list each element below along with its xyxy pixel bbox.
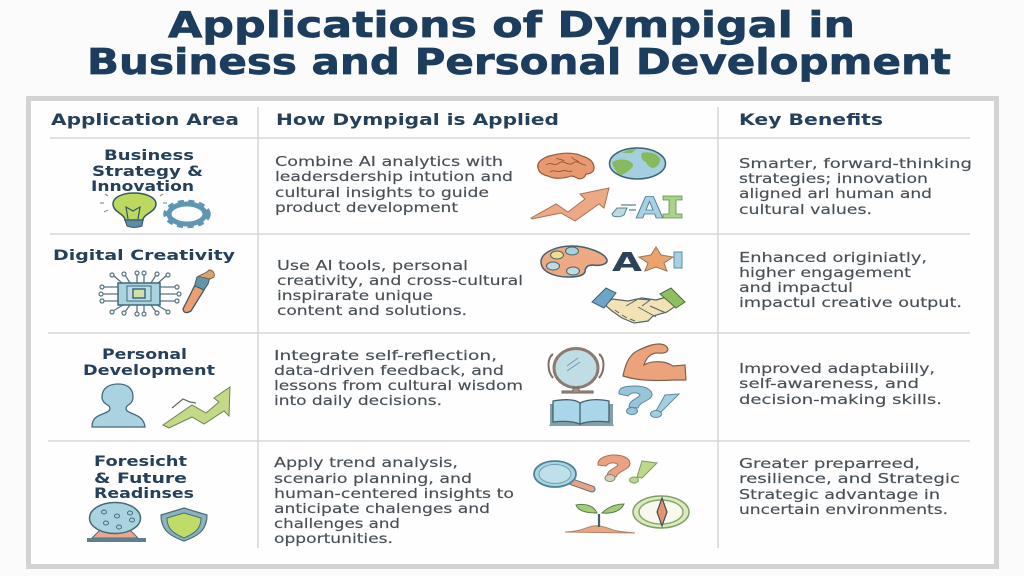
row 4 benefits (739, 456, 960, 518)
title (87, 5, 951, 83)
row 3 description (274, 348, 523, 409)
icon: AI letters: A (636, 191, 664, 225)
row 2 benefits: and impactul (739, 280, 853, 296)
icon: shield (161, 508, 207, 541)
row 1 area name: Business (104, 148, 194, 164)
row 4 description: human-centered insights to (274, 486, 514, 502)
icon: paintbrush (183, 270, 214, 313)
row 4 benefits: Strategic advantage in (739, 487, 940, 503)
row 1 benefits: Smarter, forward-thinking (739, 156, 972, 172)
row 4 description (274, 455, 514, 547)
row 2 description: Use AI tools, personal (277, 258, 468, 274)
row 2 description (277, 258, 523, 319)
icon: mirror (548, 348, 604, 393)
row 4 benefits: Greater preparreed, (739, 456, 920, 472)
row 3 description: into daily decisions. (274, 393, 442, 409)
icon: growth arrow (531, 188, 609, 221)
title: Applications of Dympigal in (168, 5, 855, 46)
row 3: personal development (83, 344, 942, 428)
icon: orange question and green exclamation (598, 455, 657, 483)
table header: Key Benefits (739, 110, 883, 129)
row 1 area name: Strategy & (92, 164, 203, 180)
icon: flexed arm (623, 344, 686, 381)
row 1 description: Combine AI analytics with (275, 154, 503, 170)
row 1: business strategy (91, 148, 972, 228)
row 4 description: scenario planning, and (274, 471, 472, 487)
table header (51, 110, 883, 129)
row 1 description: cultural insights to guide (275, 185, 489, 201)
icon: light bulb (100, 193, 167, 228)
icon: green growth arrow (163, 387, 230, 428)
icon: handshake (592, 288, 685, 323)
icon: open book (549, 400, 614, 426)
row 1 area name: Innovation (91, 179, 194, 195)
row 3 description: Integrate self-reflection, (274, 348, 497, 364)
row 3 description: data-driven feedback, and (274, 363, 504, 379)
icon: AI letters (612, 191, 682, 225)
row 4 description: opportunities. (274, 531, 393, 547)
icon: crystal ball (87, 502, 146, 542)
icon: magnifying glass (534, 461, 592, 489)
icon: person (92, 384, 145, 427)
row 3 benefits: Improved adaptabiilly, (739, 361, 935, 377)
row 1 description: product development (275, 200, 458, 216)
row 4 area name: Readinses (94, 486, 194, 502)
row 4 description: anticipate chalenges and (274, 501, 490, 517)
icon: AI with star: A (612, 248, 642, 278)
icon: circuit chip (99, 271, 181, 316)
icon: sprout (565, 504, 635, 533)
row 2 benefits: Enhanced originiatly, (739, 250, 927, 266)
row 2 benefits (739, 250, 962, 311)
table header: How Dympigal is Applied (276, 110, 559, 129)
row 3 benefits: self-awareness, and (739, 376, 919, 392)
icon: question and exclamation (619, 386, 679, 418)
row 3 description: lessons from cultural wisdom (274, 378, 523, 394)
row 2: digital creativity (53, 246, 962, 323)
row 1 benefits: aligned arl human and (739, 186, 932, 202)
icon: compass (633, 496, 689, 528)
table panel (28, 98, 996, 566)
row 4 benefits: uncertain environments. (739, 502, 948, 518)
row 4: foresight (87, 454, 960, 547)
row 4 description: challenges and (274, 516, 400, 532)
row 2 benefits: higher engagement (739, 265, 911, 281)
row 2 area name: Digital Creativity (53, 248, 236, 264)
title: Business and Personal Development (87, 42, 951, 83)
row 1 area name (91, 148, 203, 195)
row 1 description: leadersdership intution and (275, 169, 513, 185)
icon: gear (165, 202, 209, 226)
row 4 benefits: resilience, and Strategic (739, 471, 960, 487)
row 2 description: creativity, and cross-cultural (277, 273, 523, 289)
row 2 description: inspirarate unique (277, 288, 433, 304)
row 4 area name: & Future (94, 471, 187, 487)
row 2 description: content and solutions. (277, 303, 467, 319)
icon: globe (610, 148, 666, 179)
row 4 description: Apply trend analysis, (274, 455, 458, 471)
icon: palette (541, 246, 607, 277)
row 2 benefits: impactul creative output. (739, 295, 962, 311)
icon: brain (538, 153, 594, 179)
table header: Application Area (51, 110, 239, 129)
row 3 area name: Development (83, 363, 215, 379)
row 1 benefits (739, 156, 972, 218)
row 4 area name (94, 454, 194, 502)
row 3 benefits: decision-making skills. (739, 392, 942, 408)
row 4 area name: Foresicht (94, 454, 187, 470)
row 1 description (275, 154, 513, 216)
row 3 area name (83, 347, 215, 379)
icon: AI with star (612, 247, 682, 278)
row 1 benefits: strategies; innovation (739, 171, 928, 187)
row 3 area name: Personal (102, 347, 187, 363)
row 1 benefits: cultural values. (739, 202, 872, 218)
row 3 benefits (739, 361, 942, 408)
